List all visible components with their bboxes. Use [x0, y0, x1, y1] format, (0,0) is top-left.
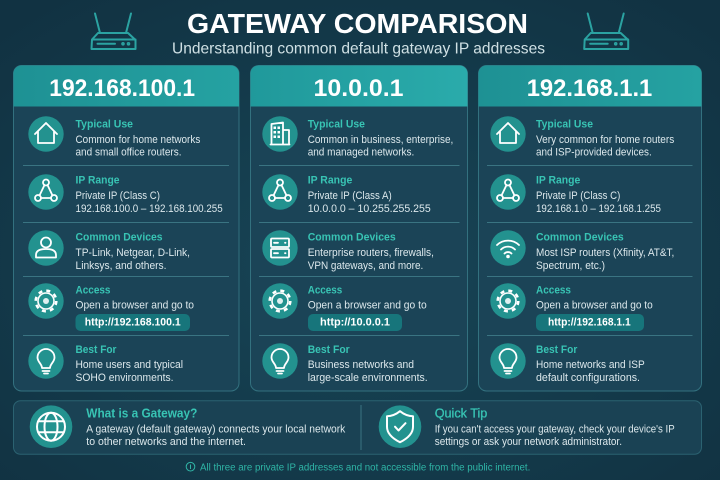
url pill [308, 314, 402, 331]
icon: network [490, 174, 526, 210]
row: typical use: and ISP-provided devices. [536, 146, 652, 158]
row: ip range: 192.168.1.0 – 192.168.1.255 [536, 203, 661, 215]
row: access: Open a browser and go to [308, 299, 427, 311]
icon: bulb [28, 343, 64, 379]
row: typical use [28, 116, 200, 158]
row: common devices: Linksys, and others. [76, 260, 166, 272]
url pill [76, 314, 190, 331]
row: common devices [262, 230, 434, 272]
row: best for [28, 343, 183, 384]
icon: house [28, 116, 64, 152]
row: best for [262, 343, 428, 384]
row: common devices [28, 230, 190, 272]
row: ip range: IP Range [76, 174, 120, 186]
icon: server [262, 230, 298, 266]
url pill [536, 314, 644, 331]
row: ip range [262, 174, 431, 215]
row: typical use [262, 116, 453, 158]
row: typical use: Typical Use [76, 118, 133, 130]
row: typical use: and managed networks. [308, 146, 414, 158]
icon: bulb [262, 343, 298, 379]
icon: wifi [490, 230, 526, 266]
row: best for [490, 343, 645, 384]
row: typical use: Typical Use [308, 118, 365, 130]
row: typical use: Typical Use [536, 118, 593, 130]
row: best for: default configurations. [536, 372, 640, 384]
row: common devices: TP-Link, Netgear, D-Link, [76, 247, 190, 259]
row: best for: SOHO environments. [76, 372, 174, 384]
row: ip range: Private IP (Class A) [308, 190, 392, 202]
row: best for: Best For [308, 344, 350, 356]
row: ip range: 10.0.0.0 – 10.255.255.255 [308, 203, 431, 215]
icon: bulb [490, 343, 526, 379]
icon: info [186, 462, 195, 471]
row: best for: Business networks and [308, 359, 414, 371]
row: ip range: Private IP (Class C) [536, 190, 620, 202]
row: common devices: Common Devices [76, 231, 162, 243]
row: best for: Home users and typical [76, 359, 183, 371]
what is a gateway: to other networks and the internet. [86, 436, 246, 448]
icon: gear [490, 283, 526, 319]
quick tip: Quick Tip [435, 406, 487, 421]
row: typical use: Common for home networks [76, 134, 200, 146]
row: common devices: Common Devices [536, 231, 624, 243]
row: common devices [490, 230, 674, 272]
what is a gateway [30, 405, 346, 448]
card header [478, 66, 702, 106]
row: ip range: Private IP (Class C) [76, 190, 160, 202]
icon: network [262, 174, 298, 210]
card header: 192.168.100.1 [49, 75, 195, 102]
url pill: http://10.0.0.1 [320, 317, 390, 329]
footer note: All three are private IP addresses and not accessible from the public internet. [200, 463, 530, 474]
row: access: Open a browser and go to [536, 299, 653, 311]
icon: router left [92, 14, 136, 49]
icon: gear [262, 283, 298, 319]
panel: 192.168.100.1 [14, 66, 239, 391]
row: common devices: Spectrum, etc.) [536, 260, 605, 272]
row: access [490, 283, 653, 331]
row: common devices: VPN gateways, and more. [308, 260, 423, 272]
row: typical use: Common in business, enterprise, [308, 134, 453, 146]
row: access [28, 283, 194, 331]
row: ip range: IP Range [308, 174, 352, 186]
row: common devices: Common Devices [308, 231, 396, 243]
panel: 10.0.0.1 [250, 66, 468, 391]
row: access: Open a browser and go to [76, 299, 194, 311]
icon: network [28, 174, 64, 210]
icon: shield [379, 405, 421, 448]
row: ip range: 192.168.100.0 – 192.168.100.255 [76, 203, 223, 215]
url pill: http://192.168.100.1 [85, 317, 181, 329]
row: typical use: Very common for home routers [536, 134, 674, 146]
title: GATEWAY COMPARISON [187, 8, 528, 39]
subtitle: Understanding common default gateway IP addresses [172, 40, 545, 58]
row: ip range [490, 174, 661, 215]
row: best for: Best For [76, 344, 117, 356]
row: ip range: IP Range [536, 174, 580, 186]
row: access: Access [308, 284, 342, 296]
card header: 10.0.0.1 [314, 75, 404, 102]
card header [250, 66, 468, 106]
row: typical use [490, 116, 674, 158]
quick tip: settings or ask your network administrator. [435, 436, 622, 448]
icon: gear [28, 283, 64, 319]
card header [14, 66, 239, 106]
what is a gateway: A gateway (default gateway) connects your local network [86, 423, 346, 435]
row: access: Access [76, 284, 110, 296]
panel: info bar [14, 401, 702, 454]
row: best for: Home networks and ISP [536, 359, 645, 371]
icon: globe [30, 405, 72, 448]
row: ip range [28, 174, 223, 215]
row: typical use: and small office routers. [76, 146, 182, 158]
icon: house [490, 116, 526, 152]
row: access [262, 283, 427, 331]
panel: 192.168.1.1 [478, 66, 702, 391]
card header: 192.168.1.1 [527, 75, 652, 102]
icon: person [28, 230, 64, 266]
row: common devices: Most ISP routers (Xfinity, AT&T, [536, 247, 674, 259]
icon: building [262, 116, 298, 152]
row: best for: large-scale environments. [308, 372, 428, 384]
quick tip [379, 405, 675, 448]
what is a gateway: What is a Gateway? [86, 406, 197, 421]
row: common devices: Enterprise routers, firewalls, [308, 247, 434, 259]
url pill: http://192.168.1.1 [548, 317, 631, 329]
row: best for: Best For [536, 344, 578, 356]
quick tip: If you can't access your gateway, check your device's IP [435, 423, 675, 435]
row: access: Access [536, 284, 571, 296]
icon: router right [584, 14, 628, 49]
